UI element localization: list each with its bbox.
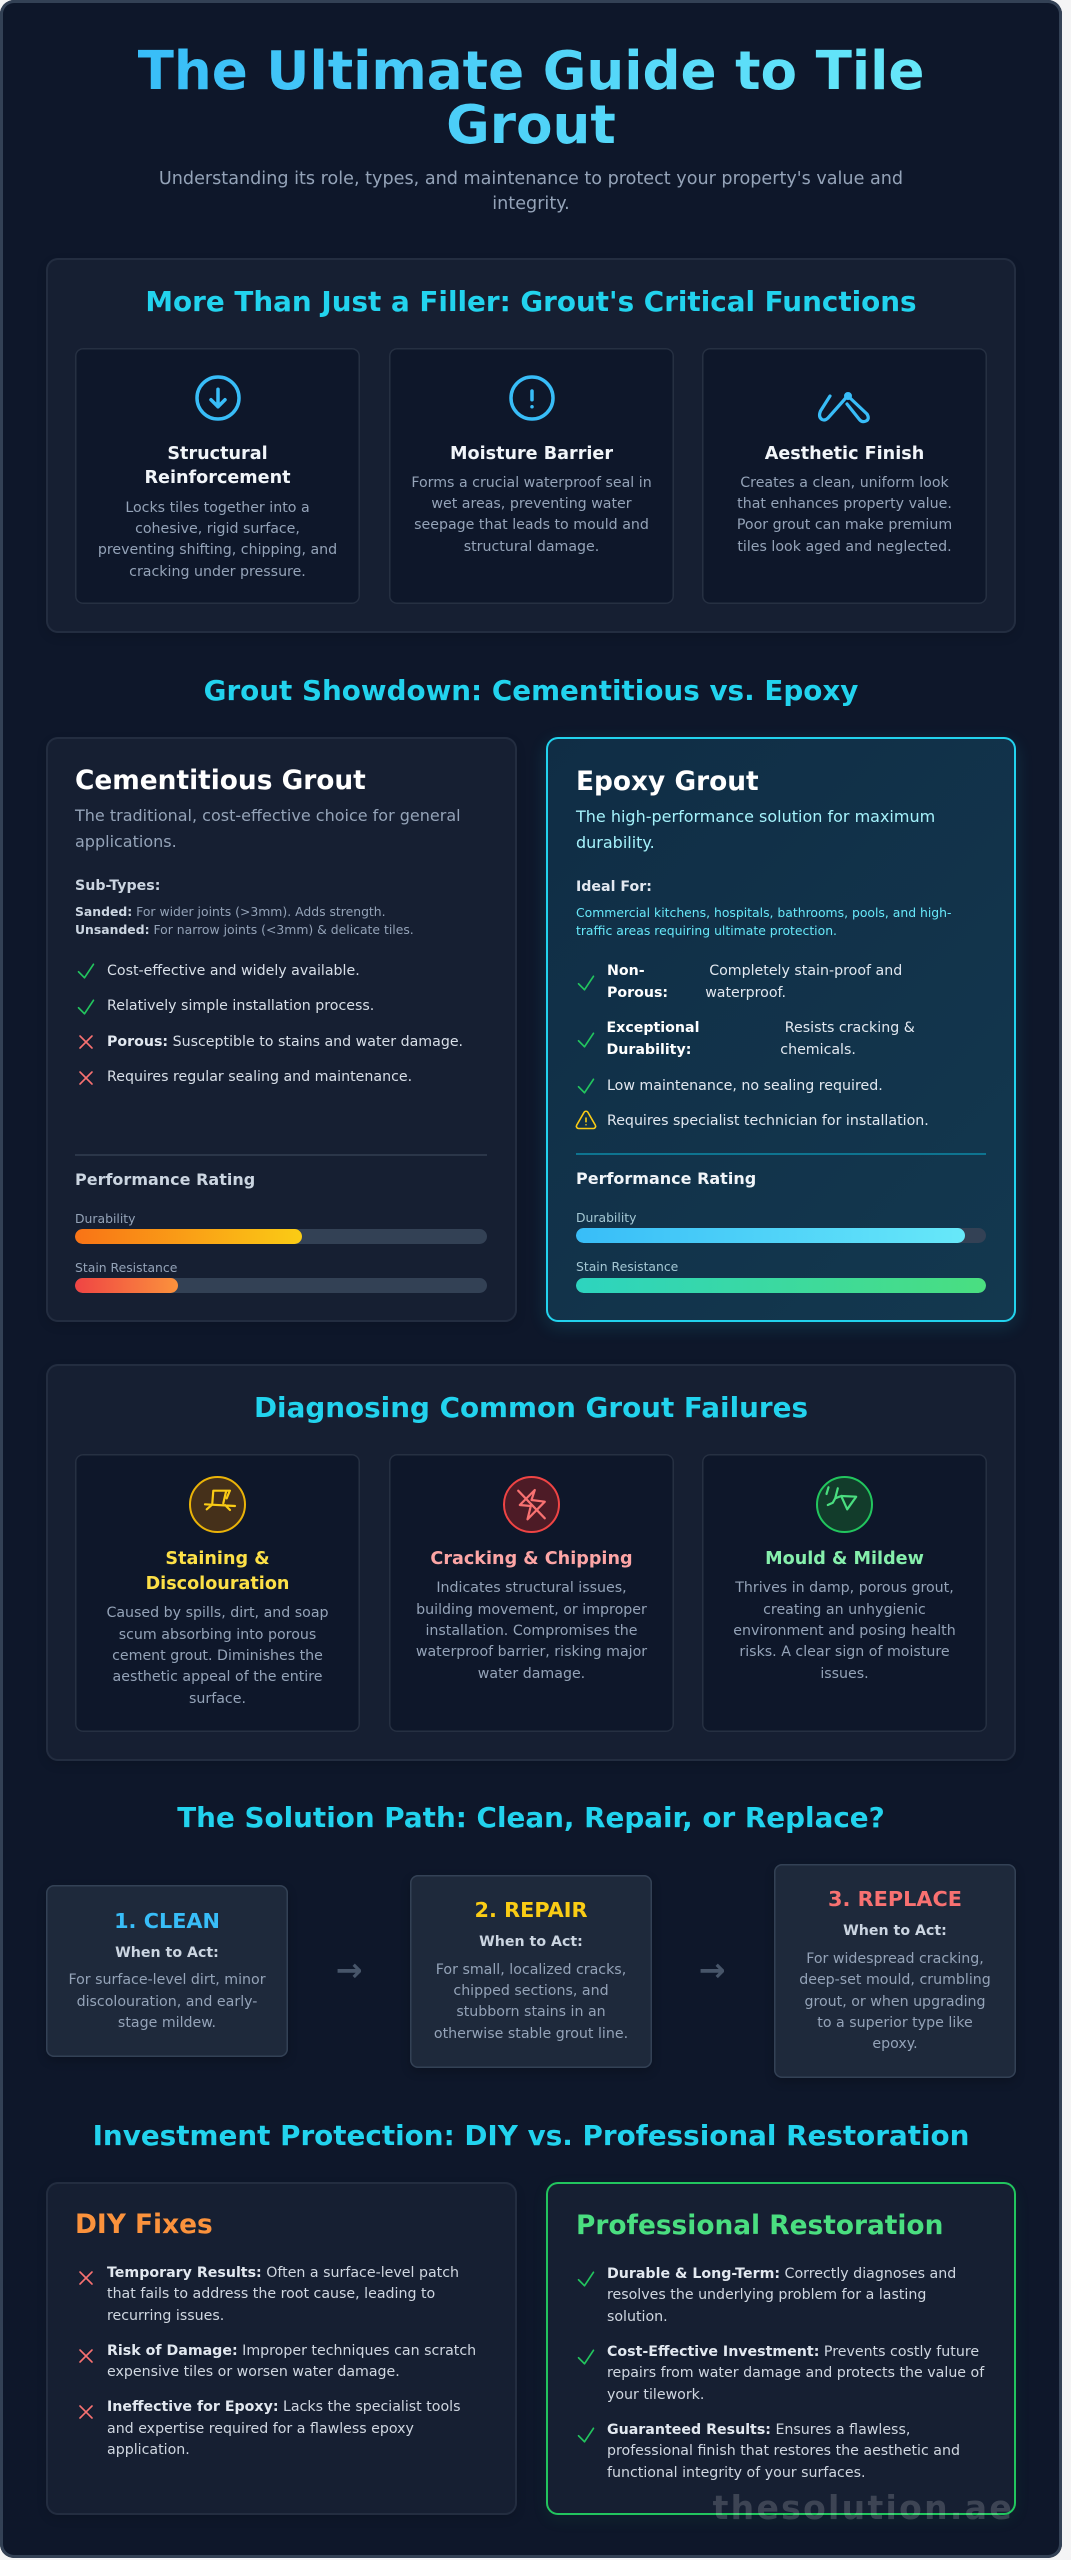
subtitle: Understanding its role, types, and maintenance to protect your property's value and xyxy=(159,169,903,189)
card text: wet areas, preventing water xyxy=(431,496,632,512)
card text: waterproof barrier, risking major xyxy=(416,1644,647,1660)
panel: critical functions xyxy=(46,258,1016,633)
list item: Durable & Long-Term: Correctly diagnoses and xyxy=(607,2266,956,2282)
list item: that fails to address the root cause, leading to xyxy=(107,2286,435,2302)
list item text: Completely stain-proof and xyxy=(709,963,902,979)
icon: check xyxy=(574,2344,598,2368)
card: mould xyxy=(702,1454,987,1732)
icon: check xyxy=(574,2422,598,2446)
list item: exceptional durability xyxy=(606,1020,699,1058)
card title: Staining & xyxy=(165,1548,270,1568)
list item: Guaranteed Results: Ensures a flawless, xyxy=(607,2422,910,2438)
step text: chipped sections, and xyxy=(453,1983,609,1999)
list item text: chemicals. xyxy=(780,1042,856,1058)
icon: check xyxy=(578,1032,594,1048)
ideal for text: traffic areas requiring ultimate protection. xyxy=(576,923,837,938)
step title: 2. REPAIR xyxy=(474,1898,588,1922)
card text: Indicates structural issues, xyxy=(436,1580,627,1596)
card: cracking xyxy=(389,1454,674,1732)
stain resistance bar xyxy=(576,1278,986,1292)
card text: cracking under pressure. xyxy=(129,564,306,580)
card title: Discolouration xyxy=(146,1574,289,1594)
icon: check xyxy=(78,999,94,1015)
card text: installation. Compromises the xyxy=(425,1623,638,1639)
icon: cross xyxy=(79,2271,93,2285)
panel: DIY fixes xyxy=(46,2182,516,2514)
icon: cross xyxy=(79,1035,93,1049)
card title: Reinforcement xyxy=(144,468,291,488)
icon: staining xyxy=(189,1476,246,1533)
list item: Risk of Damage: Improper techniques can scratch xyxy=(107,2343,476,2359)
card text: issues. xyxy=(820,1666,869,1682)
card: staining xyxy=(75,1454,360,1732)
list item: Porous: Susceptible to stains and water damage. xyxy=(107,1034,463,1050)
sub-types text xyxy=(75,904,414,937)
list item: repairs from water damage and protects the value of xyxy=(607,2365,984,2381)
panel: professional restoration xyxy=(546,2182,1016,2514)
sub-types label: Sub-Types: xyxy=(75,878,160,894)
card title: Aesthetic Finish xyxy=(765,444,924,464)
sub-types text: Sanded: For wider joints (>3mm). Adds strength. xyxy=(75,904,386,919)
step text: deep-set mould, crumbling xyxy=(799,1972,991,1988)
card text: preventing shifting, chipping, and xyxy=(98,542,337,558)
list item: Cost-effective and widely available. xyxy=(107,963,360,979)
panel description xyxy=(576,807,935,852)
panel description: The traditional, cost-effective choice for general xyxy=(75,806,461,825)
step label: When to Act: xyxy=(843,1923,947,1939)
step: replace xyxy=(774,1864,1016,2078)
panel description: durability. xyxy=(576,833,655,852)
arrow: → xyxy=(699,1951,725,1989)
list item: expensive tiles or worsen water damage. xyxy=(107,2364,400,2380)
heading: investment protection: Investment Protection: DIY vs. Professional Restoration xyxy=(93,2119,969,2152)
card text: cement grout. Diminishes the xyxy=(112,1648,323,1664)
ideal for label: Ideal For: xyxy=(576,879,652,895)
list item xyxy=(107,2265,459,2324)
list item: Cost-Effective Investment: Prevents costly future xyxy=(607,2344,979,2360)
panel: epoxy grout xyxy=(546,737,1016,1322)
step label: When to Act: xyxy=(115,1945,219,1961)
icon: cross xyxy=(74,2400,98,2424)
icon: cross xyxy=(79,1071,93,1085)
card text: Poor grout can make premium xyxy=(737,517,952,533)
panel title: Epoxy Grout xyxy=(576,766,759,796)
card text: building movement, or improper xyxy=(416,1602,647,1618)
card text xyxy=(416,1580,648,1682)
list item: recurring issues. xyxy=(107,2308,224,2324)
card text: Locks tiles together into a xyxy=(125,500,310,516)
card title: Mould & Mildew xyxy=(765,1548,924,1568)
list item: Requires regular sealing and maintenance. xyxy=(107,1069,412,1085)
durability label: Durability xyxy=(75,1211,135,1226)
card text: Creates a clean, uniform look xyxy=(740,475,949,491)
card title xyxy=(144,444,291,488)
panel description xyxy=(74,806,461,851)
ideal for text: Commercial kitchens, hospitals, bathrooms, pools, and high- xyxy=(576,905,952,920)
panel title: Professional Restoration xyxy=(576,2210,943,2241)
list item: exceptional durability: Exceptional xyxy=(606,1020,699,1036)
subtitle: integrity. xyxy=(492,194,570,214)
card text xyxy=(411,475,652,555)
step text: stubborn stains in an xyxy=(456,2004,606,2020)
step text: to a superior type like xyxy=(817,2015,973,2031)
performance rating label: Performance Rating xyxy=(75,1170,255,1189)
card text: creating an unhygienic xyxy=(763,1602,926,1618)
card text xyxy=(737,475,952,555)
heading: common failures: Diagnosing Common Grout Failures xyxy=(254,1391,808,1424)
heading: solution path: The Solution Path: Clean, Repair, or Replace? xyxy=(177,1801,885,1834)
card: moisture barrier xyxy=(389,348,674,604)
panel: cementitious grout xyxy=(46,737,516,1322)
heading: critical functions: More Than Just a Filler: Grout's Critical Functions xyxy=(145,285,917,318)
card text: water damage. xyxy=(478,1666,585,1682)
list item: non-porous: Non- xyxy=(607,963,645,979)
icon: cross xyxy=(79,2349,93,2363)
card title: Moisture Barrier xyxy=(450,444,613,464)
list item text xyxy=(780,1020,915,1058)
icon: exclamation circle xyxy=(509,375,555,421)
step text: For surface-level dirt, minor xyxy=(68,1972,266,1988)
card text xyxy=(733,1580,956,1682)
list item xyxy=(607,2420,960,2484)
title xyxy=(138,40,924,156)
panel description: The high-performance solution for maximum xyxy=(576,807,935,826)
list item: Low maintenance, no sealing required. xyxy=(607,1078,883,1094)
card text: seepage that leads to mould and xyxy=(414,517,649,533)
watermark: thesolution.ae xyxy=(713,2488,1014,2527)
icon: warning xyxy=(576,1110,596,1130)
card text: tiles look aged and neglected. xyxy=(737,539,952,555)
card text: Caused by spills, dirt, and soap xyxy=(106,1605,329,1621)
list item: functional integrity of your surfaces. xyxy=(607,2465,866,2481)
step text: stage mildew. xyxy=(118,2015,216,2031)
list item xyxy=(107,2343,476,2380)
step text: otherwise stable grout line. xyxy=(434,2026,628,2042)
panel title: Cementitious Grout xyxy=(75,765,366,796)
list item: Temporary Results: Often a surface-level patch xyxy=(107,2265,459,2281)
durability bar xyxy=(576,1228,986,1243)
icon: check xyxy=(574,2266,598,2290)
step: clean xyxy=(46,1885,288,2057)
list item: application. xyxy=(107,2442,190,2458)
arrow: → xyxy=(336,1951,362,1989)
step text: For small, localized cracks, xyxy=(436,1962,626,1978)
icon: sparkle fold xyxy=(818,392,870,424)
ideal for text xyxy=(576,905,952,938)
card title: Cracking & Chipping xyxy=(430,1548,633,1568)
card text: that enhances property value. xyxy=(737,496,952,512)
step: repair xyxy=(410,1875,652,2068)
card text: Thrives in damp, porous grout, xyxy=(735,1580,954,1596)
title: Grout xyxy=(446,94,616,156)
list item text: Resists cracking & xyxy=(785,1020,915,1036)
step text: For widespread cracking, xyxy=(806,1951,984,1967)
card text: risks. A clear sign of moisture xyxy=(739,1644,950,1660)
step text xyxy=(799,1951,991,2052)
step title: 3. REPLACE xyxy=(828,1887,962,1911)
list item: Ineffective for Epoxy: Lacks the specialist tools xyxy=(107,2399,461,2415)
panel: common failures xyxy=(46,1364,1016,1761)
card text xyxy=(106,1605,329,1707)
durability label: Durability xyxy=(576,1210,636,1225)
stain resistance label: Stain Resistance xyxy=(75,1260,177,1275)
panel title: DIY Fixes xyxy=(75,2209,213,2240)
list item: solution. xyxy=(607,2309,668,2325)
list item xyxy=(607,2342,984,2406)
list item: your tilework. xyxy=(607,2387,704,2403)
step text: epoxy. xyxy=(872,2036,918,2052)
durability bar xyxy=(75,1229,487,1244)
card text: aesthetic appeal of the entire xyxy=(113,1669,322,1685)
card text: scum absorbing into porous xyxy=(119,1627,316,1643)
card text xyxy=(98,500,337,580)
card: aesthetic finish xyxy=(702,348,987,604)
card text: environment and posing health xyxy=(733,1623,956,1639)
list item: Relatively simple installation process. xyxy=(107,998,374,1014)
sub-types text: Unsanded: For narrow joints (<3mm) & delicate tiles. xyxy=(75,922,414,937)
card: structural reinforcement xyxy=(75,348,360,604)
step text xyxy=(68,1972,266,2031)
performance rating label: Performance Rating xyxy=(576,1169,756,1188)
icon: cracking xyxy=(503,1476,560,1533)
card text: cohesive, rigid surface, xyxy=(135,521,300,537)
list item: professional finish that restores the aesthetic and xyxy=(607,2443,960,2459)
step text: grout, or when upgrading xyxy=(804,1994,986,2010)
list item: non-porous xyxy=(607,963,668,1001)
list item xyxy=(607,2264,956,2328)
list item text xyxy=(705,963,902,1001)
list item: resolves the underlying problem for a lasting xyxy=(607,2287,926,2303)
card title xyxy=(146,1548,289,1594)
icon: check xyxy=(578,975,594,991)
card text: Forms a crucial waterproof seal in xyxy=(411,475,652,491)
stain resistance bar xyxy=(75,1278,487,1293)
title: The Ultimate Guide to Tile xyxy=(138,40,924,102)
step label: When to Act: xyxy=(479,1934,583,1950)
panel description: applications. xyxy=(75,832,177,851)
step text xyxy=(434,1962,628,2042)
list item: non-porous: Porous: xyxy=(607,985,668,1001)
list item: exceptional durability: Durability: xyxy=(606,1042,691,1058)
step title: 1. CLEAN xyxy=(114,1909,220,1933)
card title: Structural xyxy=(167,444,268,464)
stain resistance label: Stain Resistance xyxy=(576,1259,678,1274)
icon: mould xyxy=(816,1476,873,1533)
heading: showdown: Grout Showdown: Cementitious vs. Epoxy xyxy=(204,674,858,707)
list item: Requires specialist technician for installation. xyxy=(607,1113,929,1129)
subtitle xyxy=(159,169,903,214)
list item text: waterproof. xyxy=(705,985,786,1001)
list item: and expertise required for a flawless epoxy xyxy=(107,2421,414,2437)
card text: structural damage. xyxy=(464,539,599,555)
icon: check xyxy=(578,1078,594,1094)
card text: surface. xyxy=(189,1691,246,1707)
icon: check xyxy=(78,963,94,979)
icon: arrow down circle xyxy=(195,375,241,421)
list item xyxy=(107,2397,461,2462)
step text: discolouration, and early- xyxy=(77,1994,257,2010)
